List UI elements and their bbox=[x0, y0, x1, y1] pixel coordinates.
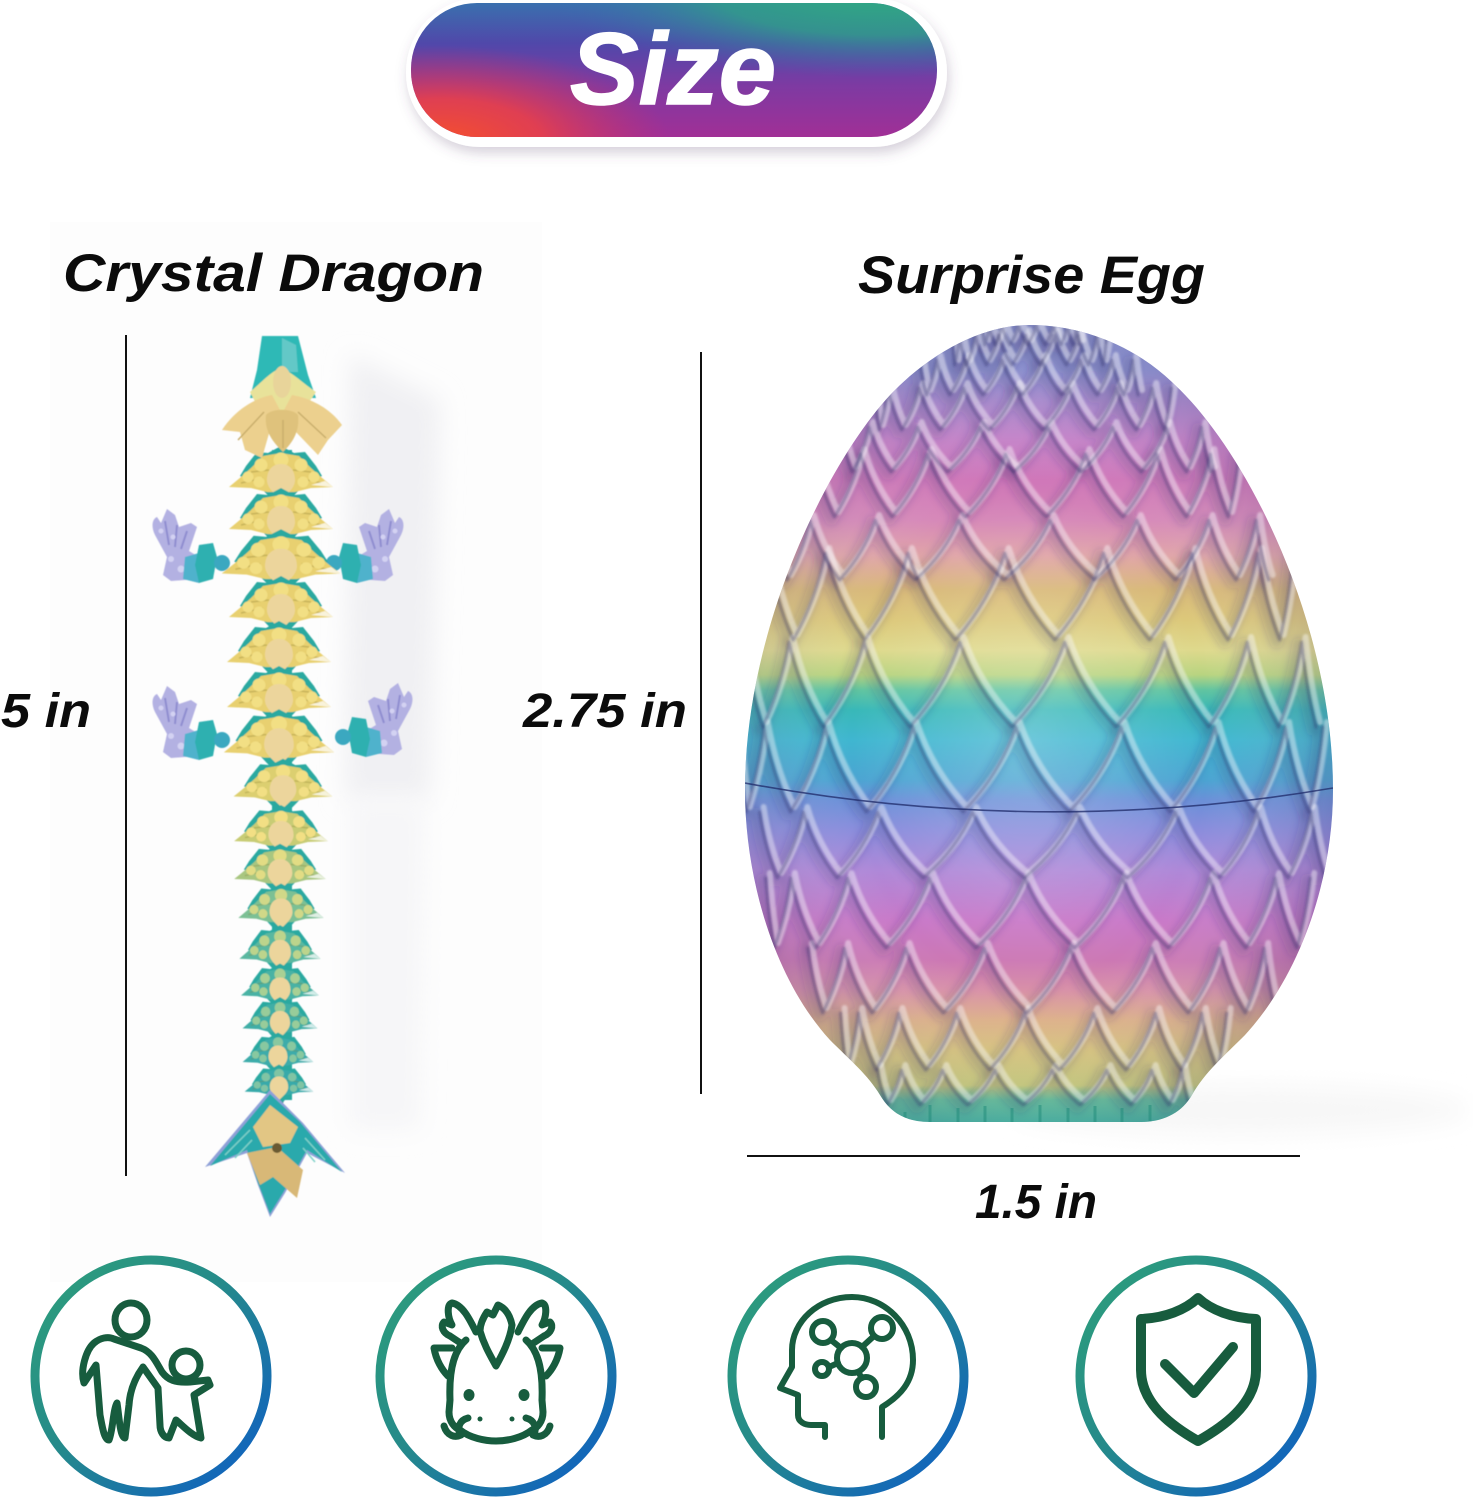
header pill: Size bbox=[406, 0, 947, 147]
egg ground shadow bbox=[1010, 1085, 1470, 1135]
dimension label: 2.75 in: 2.75 in bbox=[522, 685, 687, 738]
dragon head bbox=[222, 336, 342, 458]
dragon body segments bbox=[222, 446, 340, 1105]
heading: Surprise Egg: Surprise Egg bbox=[858, 246, 1205, 305]
background: dragon photo panel bbox=[50, 222, 542, 1282]
dimension line: egg width bbox=[747, 1155, 1300, 1157]
dimension line: egg height bbox=[700, 352, 702, 1094]
dimension label: 1.5 in: 1.5 in bbox=[975, 1176, 1097, 1229]
dimension line: dragon height bbox=[125, 335, 127, 1176]
icon badge: shield with check bbox=[1080, 1260, 1312, 1492]
heading: Crystal Dragon: Crystal Dragon bbox=[63, 244, 484, 303]
dragon tail bbox=[205, 1090, 345, 1217]
icon badge: parent and child bbox=[35, 1260, 267, 1492]
crystal dragon figure bbox=[153, 336, 412, 1217]
dimension label: 5 in: 5 in bbox=[1, 685, 91, 738]
icon badge: head with network bbox=[732, 1260, 964, 1492]
rainbow surprise egg bbox=[734, 320, 1340, 1130]
icon badge: dragon face bbox=[380, 1260, 612, 1492]
header pill: Size: Size bbox=[570, 12, 776, 126]
dragon limbs bbox=[153, 509, 412, 760]
